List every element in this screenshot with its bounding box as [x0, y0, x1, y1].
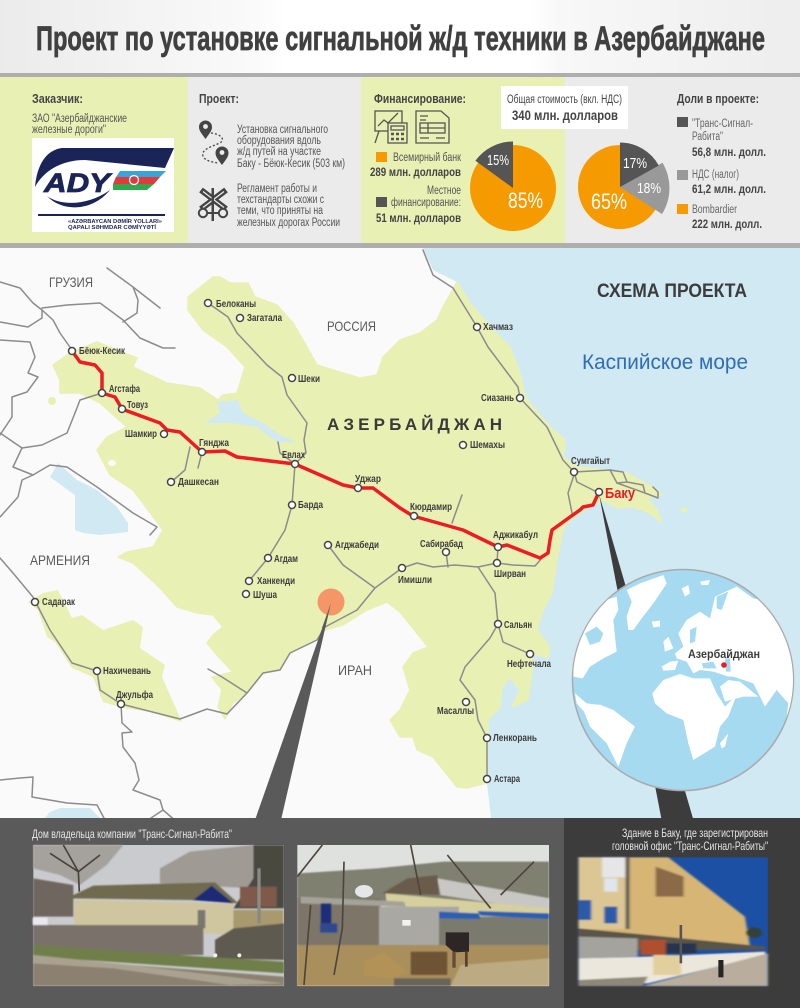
customer name: ЗАО "Азербайджанские [32, 113, 127, 125]
caption: Baku building [612, 826, 768, 853]
panel: Baku office [564, 818, 800, 1008]
map labels: countries: ИРАН [338, 662, 372, 678]
city: Сиазань: Сиазань [481, 392, 514, 404]
city: Бёюк-Кесик: Бёюк-Кесик [79, 345, 126, 357]
city: Шамкир: Шамкир [125, 428, 157, 440]
city: Баку [596, 485, 636, 502]
logo: ADY [32, 138, 174, 232]
city: Аджикабул: Аджикабул [493, 529, 538, 541]
city: Нефтечала: Нефтечала [507, 658, 551, 670]
city: Шемахы: Шемахы [470, 439, 505, 451]
header band [0, 0, 800, 73]
city: Сальян [494, 619, 532, 631]
city: Шуша: Шуша [253, 589, 277, 601]
icon: railway crossing [199, 188, 227, 221]
city: Сумгайыт: Сумгайыт [571, 455, 610, 467]
city: Баку: Баку [605, 485, 636, 502]
city: Нахичевань: Нахичевань [103, 665, 151, 677]
photo: Baku apartment building [579, 857, 768, 986]
logo: ADY: ADY [43, 168, 113, 198]
project route text [237, 124, 345, 170]
city: Ленкорань [484, 732, 537, 744]
city: Гянджа [198, 437, 229, 456]
map title: СХЕМА ПРОЕКТА [597, 281, 747, 302]
city: Белоканы: Белоканы [216, 298, 256, 310]
legend: VAT: НДС (налог) [692, 169, 739, 181]
legend: local financing [376, 185, 461, 225]
legend: VAT [677, 169, 766, 196]
city: Гянджа: Гянджа [199, 437, 229, 449]
city: Сабирабад [420, 538, 463, 556]
project standards text [237, 183, 340, 229]
project route text: ж/д путей на участке [237, 146, 321, 158]
city: Барда: Барда [298, 499, 323, 511]
panel: customer [32, 91, 174, 232]
city: Астара [484, 773, 520, 785]
city: Агджабеди [324, 539, 379, 551]
map: Caspian Sea [423, 248, 800, 818]
map: Azerbaijan land [53, 277, 662, 788]
pie chart: shares [578, 142, 669, 229]
legend: Trans-Signal-Rabita: Рабита" [692, 131, 723, 143]
icon: presentation board and calculator [375, 111, 407, 143]
caption: owner's house: Дом владельца компании "Транс-Сигнал-Рабита" [32, 827, 232, 841]
map labels: countries: ГРУЗИЯ [49, 274, 93, 290]
project route text: Баку - Бёюк-Кесик (503 км) [237, 158, 345, 170]
map: Nakhchivan land [28, 590, 182, 722]
legend: local financing: финансирование: [391, 197, 461, 209]
legend: Bombardier [677, 204, 762, 231]
logo: ADY: «AZƏRBAYCAN DƏMİR YOLLARI» [68, 218, 162, 225]
city: Товуз [118, 399, 148, 412]
icon: document [416, 111, 449, 143]
map labels: countries [30, 274, 376, 678]
legend: Trans-Signal-Rabita [677, 117, 766, 159]
legend: local financing: 51 млн. долларов [376, 211, 461, 225]
city: Уджар: Уджар [355, 473, 381, 485]
panel: financing [370, 91, 556, 231]
city: Загатала [236, 312, 282, 324]
city: Товуз: Товуз [127, 399, 148, 411]
city: Агджабеди: Агджабеди [335, 539, 379, 551]
callout: total cost: 340 млн. долларов [512, 107, 618, 123]
city: Уджар [354, 473, 381, 492]
city: Ханкенди [246, 575, 295, 587]
marker: house location [318, 588, 344, 616]
map labels: countries: РОССИЯ [327, 318, 376, 334]
customer name [32, 113, 127, 136]
legend: World Bank [370, 152, 462, 179]
city: Шемахы [460, 439, 505, 451]
map: islets [48, 397, 688, 512]
city: Садарак [32, 596, 76, 608]
legend: Bombardier: 222 млн. долл. [692, 217, 762, 231]
city: Загатала: Загатала [247, 312, 282, 324]
city: Хачмаз [474, 321, 513, 333]
city: Ленкорань: Ленкорань [493, 732, 537, 744]
city: Ширван: Ширван [494, 568, 526, 580]
pointer wedge: Baku [599, 494, 694, 822]
panel: shares [578, 91, 766, 231]
project standards text: теми, что приняты на [237, 205, 323, 217]
legend: World Bank: Всемирный банк [393, 152, 462, 164]
city: Ханкенди: Ханкенди [257, 575, 295, 587]
city: Агстафа: Агстафа [109, 383, 140, 395]
logo: ADY: QAPALI SƏHMDAR CƏMİYYƏTİ [68, 224, 157, 231]
map: background [0, 248, 800, 818]
project route text: Установка сигнального [237, 124, 328, 136]
city: Имишли: Имишли [398, 574, 432, 586]
city: Дашкесан [168, 476, 219, 488]
project route text: оборудования вдоль [237, 135, 321, 147]
city: Евлах: Евлах [282, 449, 305, 461]
city: Садарак: Садарак [42, 596, 76, 608]
legend: Bombardier: Bombardier [692, 204, 737, 216]
city: Агдам: Агдам [274, 553, 298, 565]
callout: total cost: Общая стоимость (вкл. НДС) [507, 94, 622, 106]
project standards text: Регламент работы и [237, 183, 317, 195]
pie chart: shares: 17% [623, 155, 647, 172]
pie chart: financing: 15% [487, 152, 509, 169]
city: Шеки [288, 373, 320, 385]
customer name: железные дороги" [32, 124, 106, 136]
city: Масаллы [437, 698, 474, 717]
city: Сабирабад: Сабирабад [420, 538, 463, 550]
city: Евлах [282, 449, 305, 468]
info strip [0, 73, 800, 248]
pie chart: financing: 85% [508, 188, 543, 213]
panel: project [199, 91, 345, 229]
globe inset [572, 570, 800, 790]
panel: house photos [0, 818, 564, 1008]
city: Барда [288, 499, 323, 511]
legend: VAT: 61,2 млн. долл. [692, 182, 766, 196]
city: Сальян: Сальян [504, 619, 532, 631]
city: Кюрдамир [410, 501, 452, 520]
city: Нахичевань [94, 665, 151, 677]
pie chart: financing [470, 142, 556, 231]
city: Агдам [264, 553, 298, 565]
pie chart: shares: 65% [591, 189, 627, 214]
heading: financing: Финансирование: [374, 91, 466, 106]
city: Дашкесан: Дашкесан [178, 476, 219, 488]
callout: total cost [501, 86, 628, 129]
route: Baku to Boyuk-Kesik [72, 351, 599, 558]
city: Бёюк-Кесик [68, 345, 126, 357]
city: Джульфа [116, 689, 153, 708]
legend: Trans-Signal-Rabita: 56,8 млн. долл. [692, 145, 766, 159]
heading: customer: Заказчик: [32, 91, 83, 106]
city: Белоканы [204, 298, 256, 310]
heading: shares: Доли в проекте: [677, 91, 759, 106]
photo: house with fence [33, 845, 284, 986]
map: lakes [45, 400, 297, 818]
city: Нефтечала [507, 650, 551, 670]
city: Сумгайыт [570, 455, 610, 476]
city: Хачмаз: Хачмаз [483, 321, 513, 333]
city: Кюрдамир: Кюрдамир [410, 501, 452, 513]
map labels: countries: АРМЕНИЯ [30, 552, 90, 568]
photo: yard with cow [297, 845, 549, 986]
project standards text: железных дорогах России [237, 217, 340, 229]
city: Аджикабул [493, 529, 538, 550]
city: Масаллы: Масаллы [437, 705, 474, 717]
heading: project: Проект: [199, 91, 239, 106]
city: Шуша [242, 589, 277, 601]
city: Астара: Астара [494, 773, 520, 785]
legend: Trans-Signal-Rabita: "Транс-Сигнал- [692, 118, 753, 130]
city: Агстафа [98, 383, 140, 396]
label: Azerbaijan: АЗЕРБАЙДЖАН [327, 415, 502, 434]
map: railway network [0, 250, 658, 822]
pie chart: shares: 18% [637, 180, 661, 197]
project standards text: техстандарты схожи с [237, 194, 324, 206]
pointer wedge: house [255, 603, 331, 820]
city: Джульфа: Джульфа [116, 689, 153, 701]
icon: route pins [199, 120, 228, 165]
legend: local financing: Местное [427, 185, 461, 197]
city: Имишли [398, 564, 432, 586]
globe inset: Азербайджан [688, 647, 760, 661]
label: Caspian Sea: Каспийское море [582, 351, 748, 374]
legend: World Bank: 289 млн. долларов [370, 165, 461, 179]
city: Ширван [494, 560, 526, 580]
city: Шеки: Шеки [298, 373, 320, 385]
